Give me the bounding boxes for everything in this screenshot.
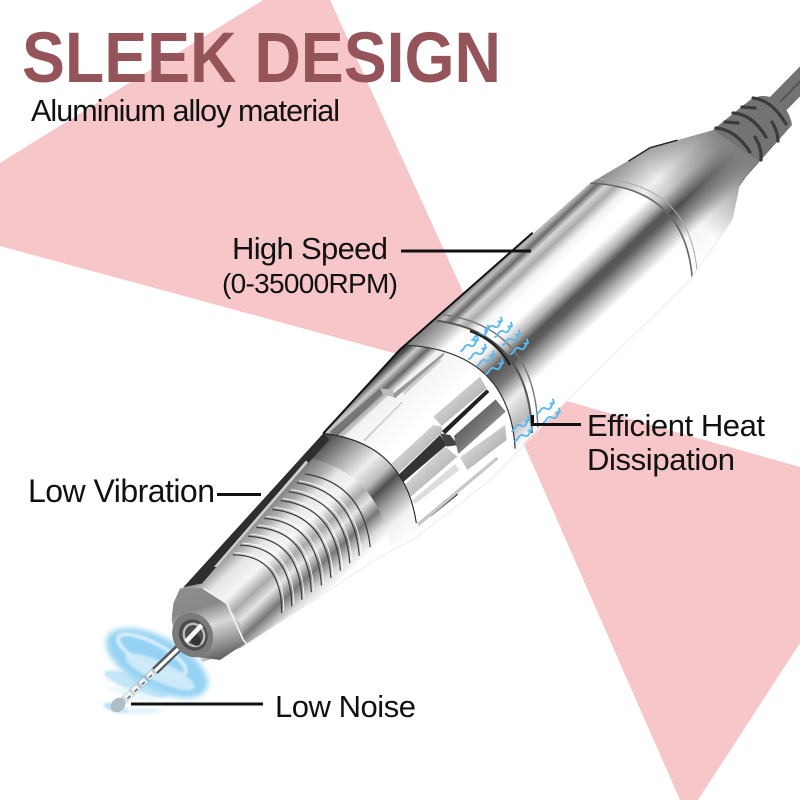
metal body [172,130,758,662]
subtitle: Aluminium alloy material [31,94,340,128]
cone upper dark band [184,434,330,588]
pen handpiece [172,130,758,662]
upper edge: dark line [317,229,535,433]
rear taper [585,130,758,246]
main barrel [436,184,686,436]
nose tip [165,588,247,664]
callout: efficient heat dissipation: Efficient Heat [587,408,765,443]
rib highlights [234,480,362,612]
heat vent slot [470,331,510,365]
callout: high speed: (0-35000RPM) [222,268,398,299]
callout: low noise: Low Noise [275,689,416,724]
drill bit [108,630,198,715]
cable [772,66,800,110]
title: SLEEK DESIGN [22,19,501,98]
blue vibration swirl [95,614,219,715]
cone upper highlight [214,460,308,567]
callout: low vibration: Low Vibration [28,473,215,509]
upper edge: rear line [629,127,677,174]
callout: high speed: High Speed [232,231,388,266]
pink triangle: upper left [0,0,470,354]
callout: efficient heat dissipation [532,408,765,477]
callout: efficient heat dissipation: Dissipation [587,442,735,477]
heat waves: upper [461,318,528,374]
fluted section [318,345,514,468]
lower edge: faint outline [242,204,750,682]
pink triangle: lower right [522,400,800,800]
flutes [330,352,507,536]
grip sleeve [699,96,792,190]
cone front ring band [302,434,414,540]
ribs [232,473,371,614]
callout: high speed [222,231,531,299]
cable groove [780,66,800,102]
heat waves: lower [512,400,560,441]
collar band [407,320,533,446]
ribbed cone [172,434,419,662]
